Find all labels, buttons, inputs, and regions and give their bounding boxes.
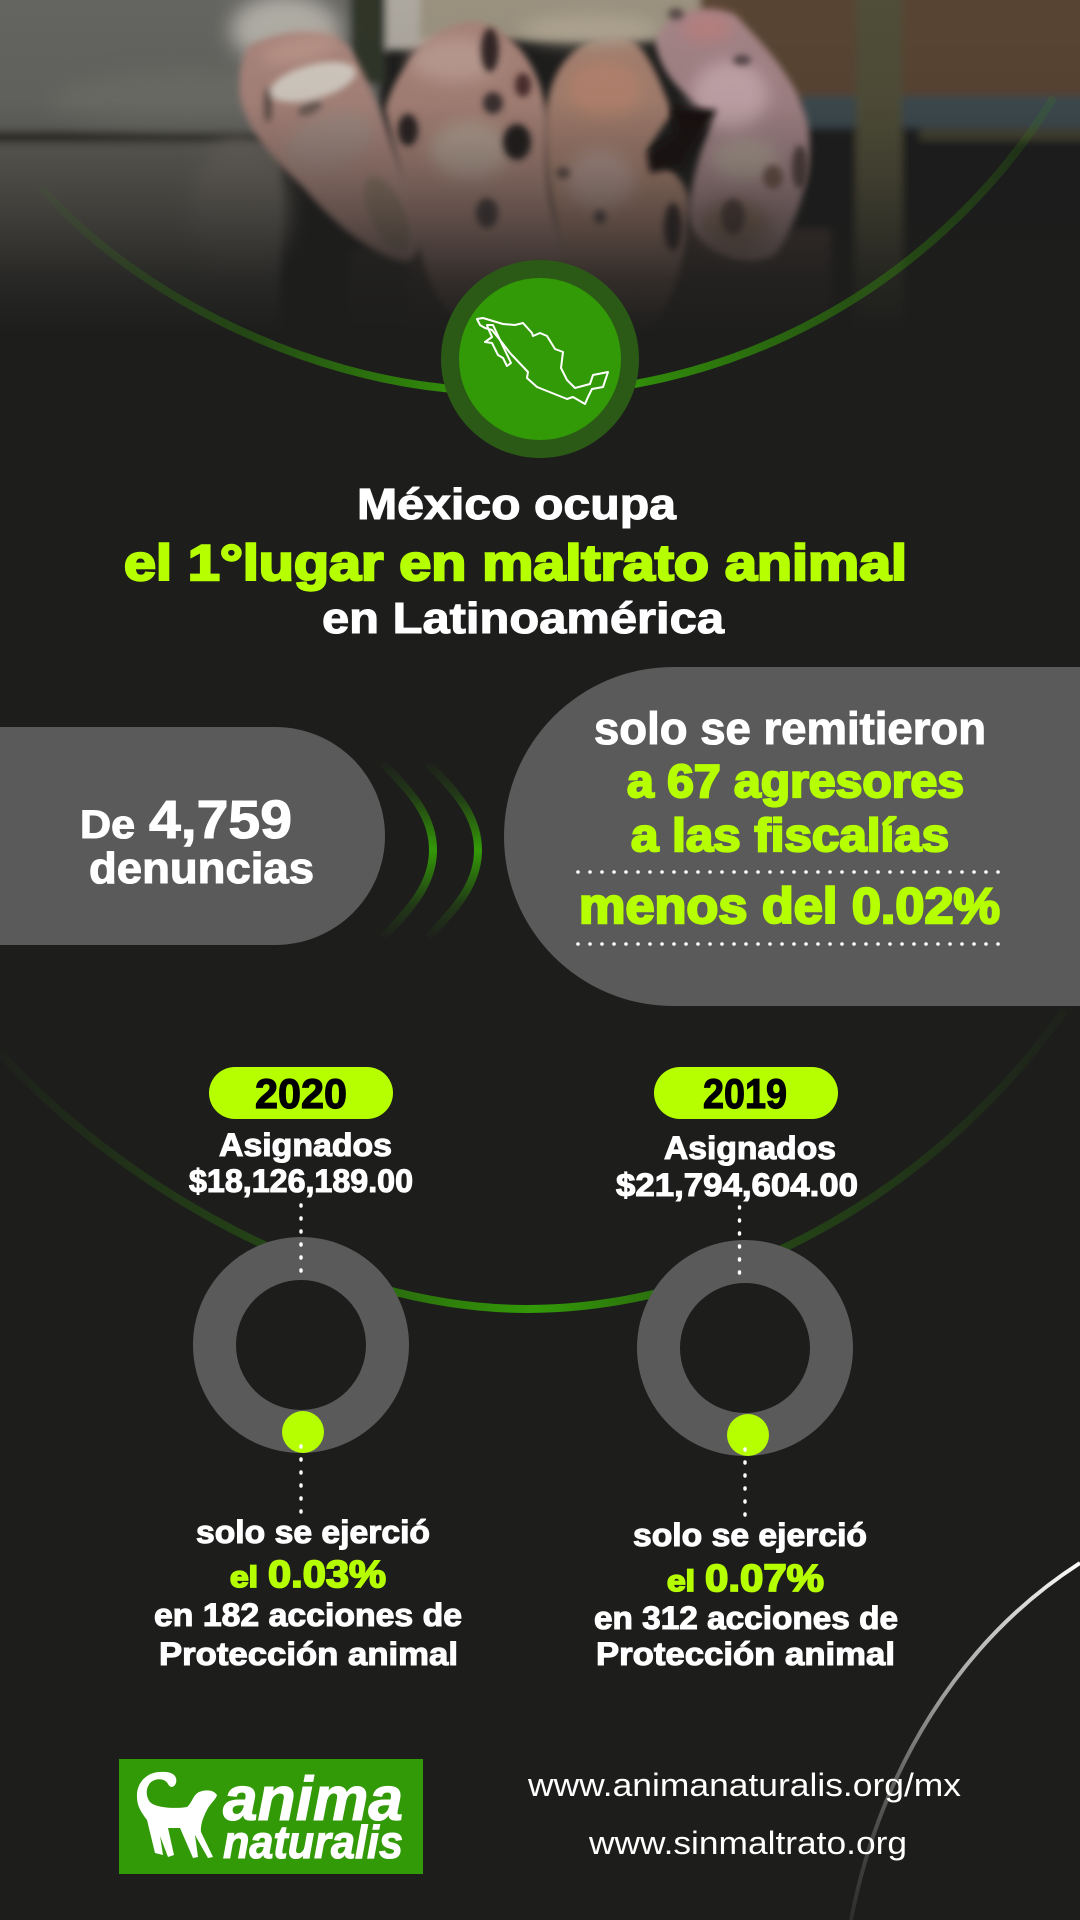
icon: Mexico outline (477, 318, 608, 404)
spent note 2020: 0.03% (268, 1554, 386, 1596)
logo: anima naturalis: anima (223, 1765, 403, 1834)
assigned budget 2020: Asignados (219, 1127, 392, 1163)
year pill 2020 (209, 1067, 393, 1119)
spent note 2020 (154, 1514, 462, 1672)
spent note 2020: el (230, 1561, 258, 1594)
title: México ocupa (357, 480, 677, 529)
website links (527, 1767, 961, 1861)
spent note 2020: Protección animal (159, 1636, 458, 1672)
assigned budget 2019 (616, 1130, 858, 1203)
panel: agresores: a 67 agresores (627, 755, 964, 807)
spent note 2019: Protección animal (596, 1636, 895, 1672)
panel: denuncias: De (80, 803, 135, 847)
year pill 2019 (654, 1067, 838, 1119)
assigned budget 2020 (189, 1127, 413, 1199)
logo: anima naturalis (119, 1759, 423, 1874)
panel: agresores: a las fiscalías (631, 809, 949, 861)
donut 2019 (658, 1207, 832, 1515)
panel: denuncias: 4,759 (149, 790, 292, 850)
title: el 1°lugar en maltrato animal (124, 535, 907, 591)
spent note 2019: en 312 acciones de (594, 1600, 898, 1636)
panel: 2019 (594, 1067, 898, 1672)
spent note 2020: solo se ejerció (196, 1514, 430, 1550)
spent note 2019 (594, 1517, 898, 1672)
photo: pig hoof behind bars (0, 0, 1080, 312)
spent note 2019: el (667, 1565, 695, 1598)
year pill 2019: 2019 (703, 1070, 787, 1117)
panel: agresores: solo se remitieron (594, 703, 986, 754)
white corner swoosh (851, 1563, 1080, 1920)
spent note 2019: 0.07% (705, 1558, 824, 1600)
assigned budget 2020: $18,126,189.00 (189, 1163, 413, 1199)
title (124, 480, 907, 643)
spent note 2019: solo se ejerció (633, 1517, 867, 1553)
year pill 2020: 2020 (255, 1070, 347, 1117)
panel: denuncias (0, 727, 385, 945)
title: en Latinoamérica (322, 594, 725, 643)
lower green arc (0, 1010, 1065, 1309)
website links: www.sinmaltrato.org (588, 1825, 907, 1861)
spent note 2020: en 182 acciones de (154, 1597, 462, 1633)
donut 2020 (214, 1205, 388, 1512)
panel: agresores: menos del 0.02% (579, 878, 1000, 934)
assigned budget 2019: $21,794,604.00 (616, 1167, 858, 1203)
icon: cat (137, 1772, 217, 1858)
panel: denuncias: denuncias (89, 844, 314, 893)
assigned budget 2019: Asignados (664, 1130, 836, 1166)
website links: www.animanaturalis.org/mx (527, 1767, 961, 1803)
panel: 2020 (154, 1067, 462, 1672)
icon: Mexico map badge (441, 260, 639, 458)
panel: agresores (504, 667, 1080, 1006)
arrow: green waves (383, 763, 478, 938)
logo: anima naturalis: naturalis (223, 1816, 403, 1868)
upper green arc (41, 97, 1054, 390)
